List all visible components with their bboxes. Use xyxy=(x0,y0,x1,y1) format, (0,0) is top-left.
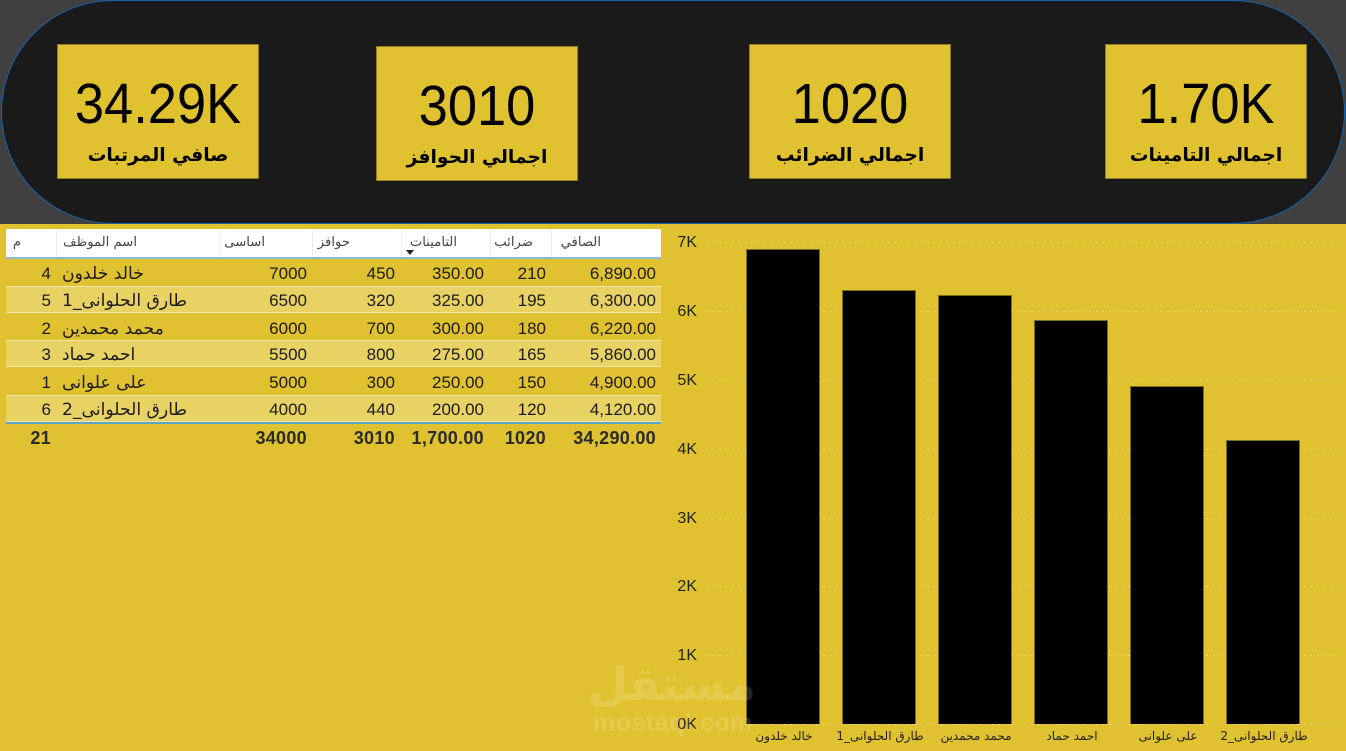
totals row: 34,290.00 xyxy=(573,428,656,448)
row 3: 180 xyxy=(518,319,546,338)
row 4: 275.00 xyxy=(432,345,484,364)
row 5: 150 xyxy=(518,373,546,392)
row 4: 5,860.00 xyxy=(590,345,656,364)
row 5: 250.00 xyxy=(432,373,484,392)
row 3: محمد محمدين xyxy=(62,319,164,339)
row 2 xyxy=(6,286,661,313)
sort arrow xyxy=(406,250,414,255)
KPI card: total taxes: اجمالي الضرائب xyxy=(776,145,924,166)
header band xyxy=(0,0,1346,224)
totals row: 3010 xyxy=(354,428,395,448)
y axis labels: 7K xyxy=(677,234,697,251)
KPI card: net salaries: 34.29K xyxy=(75,72,241,136)
row 2: 195 xyxy=(518,291,546,310)
row 6: 440 xyxy=(367,400,395,419)
table header: التامينات xyxy=(410,235,457,250)
row 1: 4 xyxy=(42,264,51,283)
row 3: 2 xyxy=(42,319,51,338)
KPI card: total insurance xyxy=(1105,44,1307,179)
watermark xyxy=(588,657,756,737)
KPI card: total incentives xyxy=(376,46,578,181)
x axis labels: خالد خلدون xyxy=(755,729,813,743)
watermark: مستقل xyxy=(588,657,756,711)
row 4: 3 xyxy=(42,345,51,364)
row 1: 450 xyxy=(367,264,395,283)
KPI card: total incentives: 3010 xyxy=(419,74,535,138)
y axis labels: 1K xyxy=(677,647,697,664)
table header: ضرائب xyxy=(494,235,533,250)
totals row: 34000 xyxy=(255,428,307,448)
row 4: 800 xyxy=(367,345,395,364)
table header xyxy=(6,229,661,259)
table header: اسم الموظف xyxy=(63,235,137,250)
row 3: 700 xyxy=(367,319,395,338)
row 2: 5 xyxy=(42,291,51,310)
table header: الصافي xyxy=(561,235,601,250)
row 6: طارق الحلوانى_2 xyxy=(62,400,187,420)
row 6: 200.00 xyxy=(432,400,484,419)
row 4: احمد حماد xyxy=(62,345,135,365)
row 6 xyxy=(6,395,661,422)
totals row: 21 xyxy=(30,428,51,448)
bar chart xyxy=(677,234,1332,743)
row 3 xyxy=(42,319,656,339)
x axis labels: احمد حماد xyxy=(1046,729,1098,743)
x axis labels: على علوانى xyxy=(1139,729,1197,743)
totals row xyxy=(6,422,661,451)
salary table xyxy=(6,229,661,448)
row 6: 6 xyxy=(42,400,51,419)
y axis labels: 5K xyxy=(677,372,697,389)
KPI card: total insurance: اجمالي التامينات xyxy=(1130,145,1282,166)
row 3: 6,220.00 xyxy=(590,319,656,338)
y axis labels: 0K xyxy=(677,716,697,733)
x axis labels: طارق الحلوانى_1 xyxy=(836,729,924,743)
row 5: 4,900.00 xyxy=(590,373,656,392)
row 6: 4,120.00 xyxy=(590,400,656,419)
row 2: 325.00 xyxy=(432,291,484,310)
table header: اساسى xyxy=(224,235,265,250)
row 4 xyxy=(6,340,661,367)
y axis labels: 2K xyxy=(677,578,697,595)
row 5: 300 xyxy=(367,373,395,392)
KPI card: net salaries xyxy=(57,44,259,179)
row 2: 6,300.00 xyxy=(590,291,656,310)
KPI card: total insurance: 1.70K xyxy=(1137,72,1275,136)
header column separators xyxy=(56,229,57,257)
row 3: 6000 xyxy=(269,319,307,338)
y axis labels: 3K xyxy=(677,510,697,527)
row 5: على علوانى xyxy=(62,373,146,393)
KPI card: net salaries: صافي المرتبات xyxy=(88,145,228,166)
row 1: 350.00 xyxy=(432,264,484,283)
row 1 xyxy=(42,264,656,284)
header pill xyxy=(1,0,1345,224)
row 2: 320 xyxy=(367,291,395,310)
row 5: 5000 xyxy=(269,373,307,392)
row 4: 165 xyxy=(518,345,546,364)
row 6: 120 xyxy=(518,400,546,419)
row 1: 7000 xyxy=(269,264,307,283)
totals row: 1,700.00 xyxy=(412,428,484,448)
row 1: خالد خلدون xyxy=(62,264,144,284)
KPI card: total incentives: اجمالي الحوافز xyxy=(407,147,547,168)
row 2: 6500 xyxy=(269,291,307,310)
row 4: 5500 xyxy=(269,345,307,364)
x axis labels: محمد محمدين xyxy=(940,729,1012,743)
y axis labels: 6K xyxy=(677,303,697,320)
KPI card: total taxes: 1020 xyxy=(792,72,908,136)
row 3: 300.00 xyxy=(432,319,484,338)
totals row: 1020 xyxy=(505,428,546,448)
row 6: 4000 xyxy=(269,400,307,419)
watermark: mostaql.com xyxy=(593,709,753,737)
x axis labels: طارق الحلوانى_2 xyxy=(1220,729,1308,743)
row 5: 1 xyxy=(42,373,51,392)
table header: م xyxy=(13,235,21,250)
KPI card: total taxes xyxy=(749,44,951,179)
row 5 xyxy=(42,373,656,393)
y axis labels: 4K xyxy=(677,441,697,458)
row 1: 210 xyxy=(518,264,546,283)
row 2: طارق الحلوانى_1 xyxy=(62,291,187,311)
row 1: 6,890.00 xyxy=(590,264,656,283)
table header: حوافز xyxy=(318,235,350,250)
